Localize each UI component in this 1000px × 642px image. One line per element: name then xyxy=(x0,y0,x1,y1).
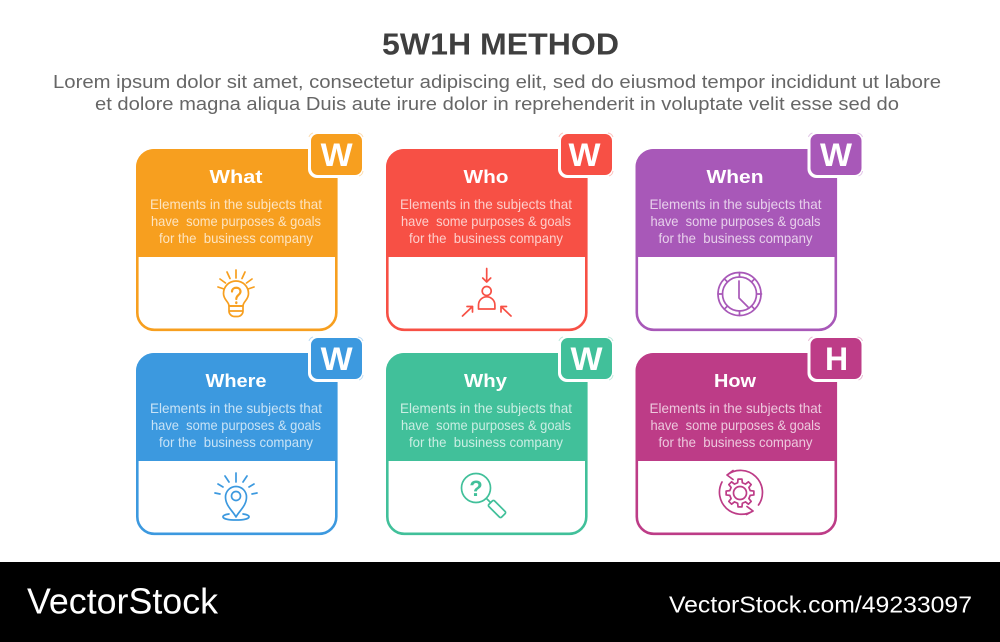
panel: who xyxy=(386,132,614,330)
subtitle text xyxy=(53,72,941,114)
heading: why: Why xyxy=(464,371,507,391)
badge: W xyxy=(558,132,614,178)
badge: W xyxy=(308,132,364,178)
title: 5W1H METHOD xyxy=(382,26,619,62)
badge: W: W xyxy=(570,341,603,377)
badge: W: W xyxy=(321,137,354,173)
body text: how: for the business company xyxy=(658,434,812,450)
body text: why: have some purposes & goals xyxy=(401,417,571,433)
body text: where xyxy=(150,400,322,450)
panel: why xyxy=(386,336,614,534)
icon: person with arrows xyxy=(462,268,511,316)
footer url text: VectorStock.com/49233097 xyxy=(669,592,972,618)
body text: what: Elements in the subjects that xyxy=(150,196,322,212)
body text: why: Elements in the subjects that xyxy=(400,400,572,416)
body text: how xyxy=(650,400,822,450)
badge: W xyxy=(308,336,364,382)
badge: W xyxy=(558,336,614,382)
body text: where: Elements in the subjects that xyxy=(150,400,322,416)
panel: how xyxy=(636,336,863,534)
icon: gear with cycle arrows xyxy=(719,470,762,514)
footer logo text: VectorStock xyxy=(27,580,219,622)
body text: when: for the business company xyxy=(658,230,812,246)
body text: how: have some purposes & goals xyxy=(650,417,820,433)
body text: who: for the business company xyxy=(409,230,563,246)
badge: W: W xyxy=(820,137,853,173)
heading: how: How xyxy=(714,371,757,391)
body text: why xyxy=(400,400,572,450)
body text: where: for the business company xyxy=(159,434,313,450)
body text: what: have some purposes & goals xyxy=(151,213,321,229)
icon: magnifier with question mark xyxy=(462,474,506,518)
badge: W xyxy=(808,132,863,178)
subtitle text: Lorem ipsum dolor sit amet, consectetur adipiscing elit, sed do eiusmod tempor incididunt ut labore xyxy=(53,72,941,92)
icon: magnifier with question mark: ? xyxy=(469,476,483,501)
footer bar xyxy=(0,562,1000,642)
heading: who: Who xyxy=(464,167,508,187)
body text: when: Elements in the subjects that xyxy=(650,196,822,212)
body text: what: for the business company xyxy=(159,230,313,246)
badge: H: H xyxy=(825,341,848,377)
body text: when: have some purposes & goals xyxy=(650,213,820,229)
panel: what xyxy=(136,132,364,330)
body text: where: have some purposes & goals xyxy=(151,417,321,433)
icon: light bulb with question mark xyxy=(218,270,254,316)
body text: why: for the business company xyxy=(409,434,563,450)
badge: H xyxy=(808,336,863,382)
heading: when: When xyxy=(706,167,764,187)
subtitle text: et dolore magna aliqua Duis aute irure dolor in reprehenderit in voluptate velit esse sed do xyxy=(95,94,899,114)
heading: what: What xyxy=(210,167,262,187)
body text: who: Elements in the subjects that xyxy=(400,196,572,212)
panel: when xyxy=(636,132,863,330)
body text: who: have some purposes & goals xyxy=(401,213,571,229)
body text: who xyxy=(400,196,572,246)
heading: where: Where xyxy=(206,371,266,391)
panel: where xyxy=(136,336,364,534)
body text: how: Elements in the subjects that xyxy=(650,400,822,416)
badge: W: W xyxy=(568,137,601,173)
icon: location pin xyxy=(215,473,257,520)
icon: clock xyxy=(718,272,762,316)
body text: what xyxy=(150,196,322,246)
body text: when xyxy=(650,196,822,246)
badge: W: W xyxy=(321,341,354,377)
